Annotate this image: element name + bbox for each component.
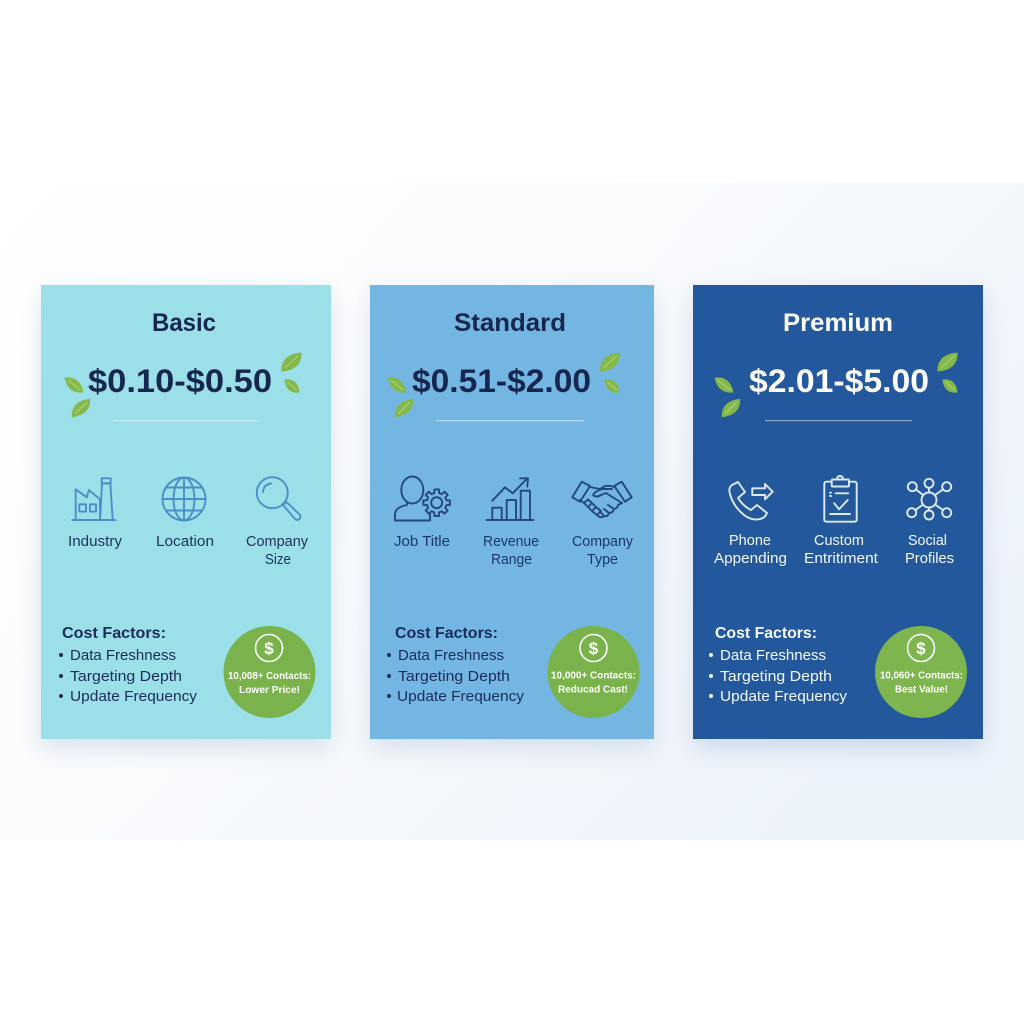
label: Company Type: Type [587, 552, 618, 568]
label: Social Profiles: Profiles [905, 551, 954, 567]
label: Revenue Range: Revenue [483, 534, 539, 550]
label: Social Profiles [905, 533, 954, 567]
cost factors: Premium: Cost Factors: [715, 625, 817, 642]
panel: Standard [370, 285, 654, 749]
label: Phone Appending: Phone [729, 533, 771, 549]
cost factors: Standard: Cost Factors: [395, 625, 498, 642]
label: Custom Entritiment [804, 533, 878, 567]
cost factors: Premium: Update Frequency [720, 688, 848, 705]
icon: growth chart [487, 478, 533, 520]
heading: Standard: Standard [454, 309, 566, 337]
price: Basic: $0.10-$0.50 [88, 363, 272, 399]
badge: Basic [224, 626, 316, 718]
icon: magnifier [257, 477, 300, 520]
background band [0, 183, 1024, 840]
label: Company Size: Company [246, 534, 309, 550]
label: Industry: Industry [68, 534, 123, 550]
label: Phone Appending [714, 533, 787, 567]
label: Revenue Range [483, 534, 539, 568]
badge: Basic: $ [264, 639, 274, 658]
cost factors: Premium: Data Freshness [720, 647, 826, 664]
heading: Basic: Basic [152, 309, 216, 337]
label: Phone Appending: Appending [714, 551, 787, 567]
panel: Basic [41, 285, 331, 749]
price: Standard: $0.51-$2.00 [412, 363, 591, 399]
badge: Basic: 10,008+ Contacts: [228, 671, 311, 682]
badge: Premium: Best Value! [895, 684, 948, 696]
badge: Standard: $ [589, 639, 599, 658]
cost factors: Standard: Update Frequency [397, 688, 525, 705]
icon: leaves [61, 348, 306, 421]
cost factors: Basic: Targeting Depth [70, 668, 182, 685]
label: Social Profiles: Social [908, 533, 947, 549]
label: Custom Entritiment: Custom [814, 533, 864, 549]
cost factors: Standard: Data Freshness [398, 647, 504, 664]
heading: Premium: Premium [783, 309, 893, 337]
icon: person with gear [395, 476, 450, 520]
icon: leaves [711, 348, 962, 421]
label: Company Size [246, 534, 309, 568]
cost factors: Premium [709, 625, 848, 705]
badge: Standard [548, 626, 640, 718]
badge: Premium: 10,060+ Contacts: [880, 670, 963, 682]
badge: Standard: 10,000+ Contacts: [551, 670, 636, 682]
icon: network [907, 479, 951, 520]
label: Company Type: Company [572, 534, 634, 550]
cost factors: Premium: Targeting Depth [720, 668, 832, 685]
label: Custom Entritiment: Entritiment [804, 551, 878, 567]
badge: Premium: $ [916, 639, 926, 658]
icon: leaves [384, 348, 625, 421]
label: Job Title: Job Title [394, 534, 450, 550]
cost factors: Standard: Targeting Depth [398, 668, 510, 685]
cost factors: Basic: Cost Factors: [62, 625, 166, 642]
label: Company Size: Size [265, 552, 291, 568]
cost factors: Basic: Update Frequency [70, 688, 198, 705]
cost factors: Standard [387, 625, 525, 705]
badge: Basic: Lower Price! [239, 685, 300, 696]
icon: clipboard [824, 476, 857, 522]
label: Company Type [572, 534, 634, 568]
label: Location: Location [156, 534, 214, 550]
icon: factory [72, 478, 115, 520]
icon: globe [162, 478, 206, 520]
cost factors: Basic [59, 625, 198, 705]
panel: Premium [693, 285, 983, 749]
badge: Premium [875, 626, 967, 718]
price: Premium: $2.01-$5.00 [749, 363, 929, 399]
icon: handshake [572, 482, 632, 517]
cost factors: Basic: Data Freshness [70, 647, 176, 664]
badge: Standard: Reducad Cast! [558, 684, 628, 696]
icon: phone with arrow [729, 482, 773, 520]
label: Revenue Range: Range [491, 552, 532, 568]
